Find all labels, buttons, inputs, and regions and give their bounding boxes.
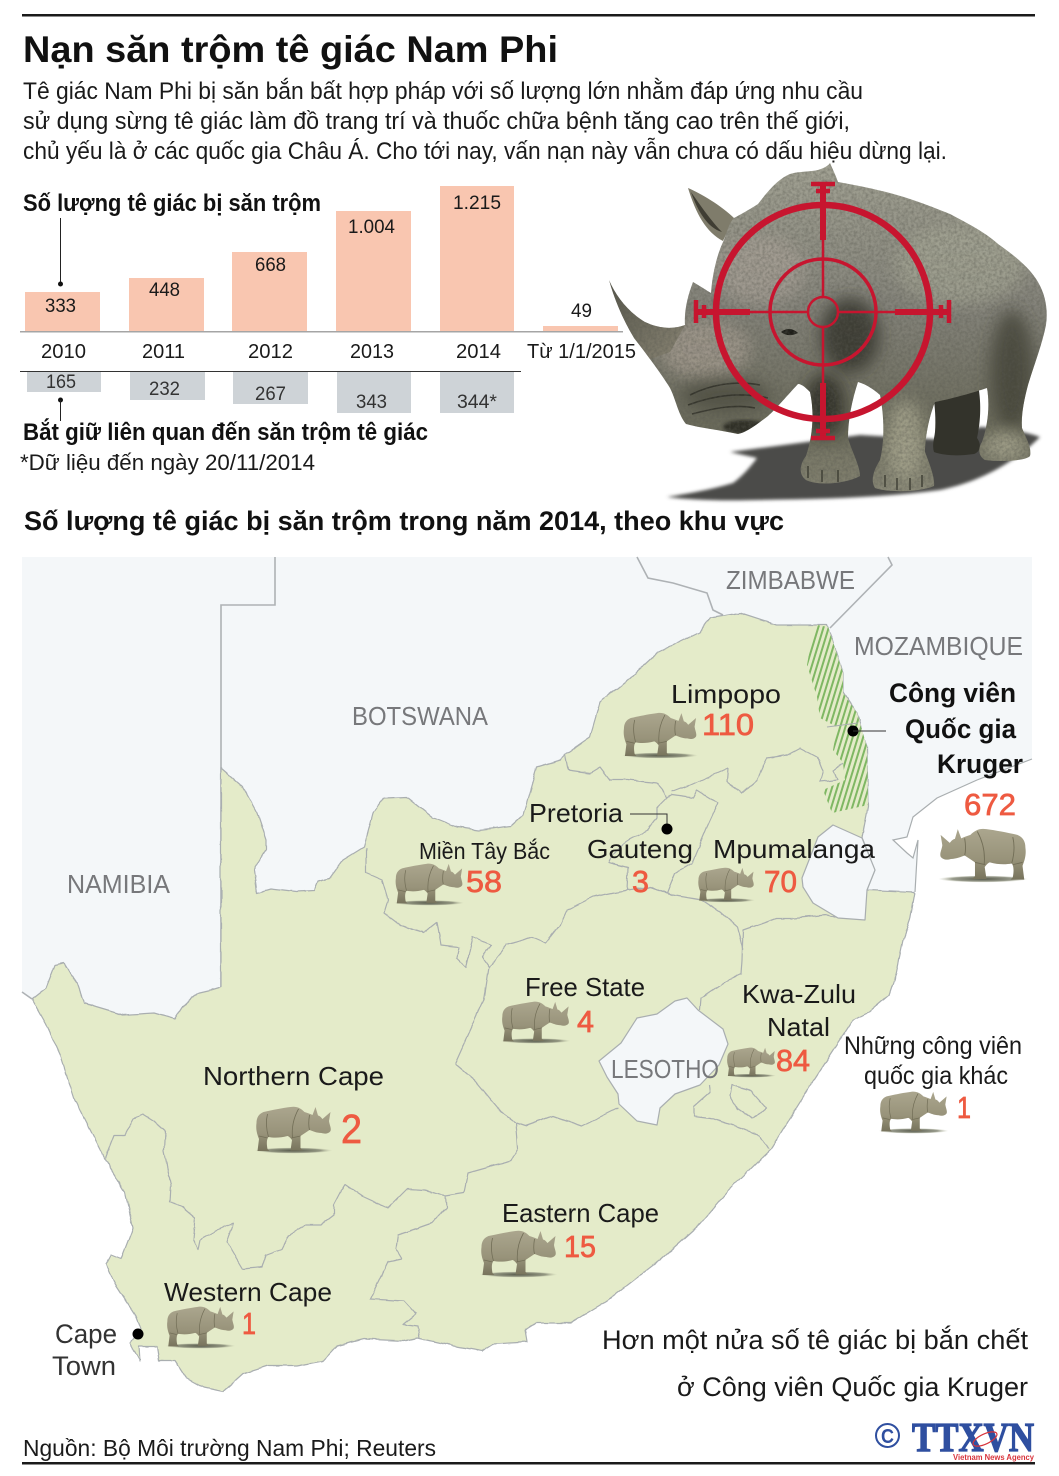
ground shadow [667,427,1040,500]
arrest axis [20,371,521,372]
country labels [67,565,1023,1084]
neighbouring countries [22,557,1032,1030]
year labels [41,341,636,363]
province borders [105,748,845,1338]
region: Mpumalanga: Mpumalanga [713,834,876,864]
region: Limpopo: 110 [702,707,754,742]
arrest values: 344* [457,392,498,413]
city: Pretoria: Pretoria [529,798,624,828]
region: Limpopo [622,679,781,758]
rhino body [609,163,1047,492]
region: Eastern Cape: 15 [564,1229,596,1264]
region: Eastern Cape: Eastern Cape [502,1198,659,1228]
region: Kwa-Zulu Natal: Natal [767,1012,830,1042]
left ear [688,188,734,241]
year labels: 2013 [350,341,394,363]
region: Mpumalanga [697,834,876,902]
region: other national parks: quốc gia khác [864,1062,1008,1090]
poached values: 448 [149,280,180,301]
region: Free State [501,972,645,1044]
region: Free State: 4 [577,1004,594,1039]
region: Gauteng: Gauteng [587,834,693,864]
country labels: BOTSWANA [352,701,489,731]
arrest values: 343 [356,392,387,413]
section heading: Số lượng tê giác bị săn trộm trong năm 2014, theo khu vực [24,506,784,536]
region: Kruger National Park: Quốc gia [905,714,1017,744]
region: Kwa-Zulu Natal: 84 [776,1043,810,1078]
chart heading: poached: Số lượng tê giác bị săn trộm [23,190,321,217]
arrest values [46,372,498,413]
poached values: 1.004 [348,217,395,238]
top rule [22,14,1035,16]
Kruger National Park hatching [807,625,868,813]
intro text: chủ yếu là ở các quốc gia Châu Á. Cho tới nay, vấn nạn này vẫn chưa có dấu hiệu dừng lại. [23,138,947,165]
region: Gauteng [587,834,693,899]
region: Northern Cape: Northern Cape [203,1061,384,1091]
bottom rule [22,1462,1035,1464]
year labels: Từ 1/1/2015 [527,341,636,363]
country labels: NAMIBIA [67,869,171,899]
city: Cape Town: Cape [55,1319,117,1349]
title: Nạn săn trộm tê giác Nam Phi [23,29,558,70]
region: Kruger National Park: 672 [964,787,1016,822]
chart heading: arrests: Bắt giữ liên quan đến săn trộm tê giác [23,418,428,446]
intro text: sử dụng sừng tê giác làm đồ trang trí và thuốc chữa bệnh tăng cao trên thế giới, [23,108,850,135]
logo: TTXVN [876,1414,1034,1462]
region: Kwa-Zulu Natal: Kwa-Zulu [742,979,856,1009]
region: other national parks: Những công viên [844,1032,1022,1060]
logo: TTXVN: TTXVN [912,1414,1034,1460]
source: Nguồn: Bộ Môi trường Nam Phi; Reuters [23,1435,436,1461]
intro text [23,78,947,165]
callout: Kruger share: ở Công viên Quốc gia Kruger [677,1372,1028,1402]
South Africa land [32,613,915,1392]
leader line: arrests [58,398,63,421]
footnote: *Dữ liệu đến ngày 20/11/2014 [20,450,315,475]
region: Kruger National Park [848,678,1028,882]
year labels: 2012 [248,341,293,363]
country labels: MOZAMBIQUE [854,631,1023,661]
crosshair [696,184,949,438]
Swaziland [802,825,875,920]
region: Kruger National Park: Công viên [889,678,1016,708]
intro text: Tê giác Nam Phi bị săn bắn bất hợp pháp với số lượng lớn nhằm đáp ứng nhu cầu [23,78,863,105]
leader line: poached [58,218,63,286]
year labels: 2010 [41,341,86,363]
arrest values: 267 [255,384,286,405]
region: Kwa-Zulu Natal [726,979,856,1078]
country labels: LESOTHO [611,1054,719,1084]
region: Northern Cape: 2 [341,1106,362,1152]
year labels: 2014 [456,341,501,363]
year labels: 2011 [142,341,185,363]
arrest bars [27,372,514,413]
big rhino with crosshair [600,150,1059,500]
poached values: 668 [255,255,286,276]
logo: TTXVN: Vietnam News Agency [953,1452,1034,1462]
country labels: ZIMBABWE [726,565,855,595]
region: North West: Miền Tây Bắc [419,838,550,864]
national borders [22,557,892,999]
Lesotho [599,998,728,1125]
region: Gauteng: 3 [632,864,649,899]
far hind leg [933,385,980,455]
poached values [45,193,592,322]
region: North West: 58 [466,864,502,899]
region: North West [394,838,550,906]
coast of Mozambique [893,759,1032,892]
city: Cape Town [52,1319,144,1381]
arrest values: 165 [46,372,76,393]
region: other national parks [844,1032,1022,1134]
baseline [20,331,623,332]
region: other national parks: 1 [957,1090,971,1125]
poached values: 333 [45,296,76,317]
poached bars [25,186,618,332]
region: Kruger National Park: Kruger [937,749,1023,779]
region: Western Cape: Western Cape [164,1277,332,1307]
region: Northern Cape [203,1061,384,1154]
city: Pretoria [529,798,672,834]
callout: Kruger share [602,1324,1028,1402]
arrest values: 232 [149,379,180,400]
region: Free State: Free State [525,972,645,1002]
region: Limpopo: Limpopo [671,679,781,709]
region: Western Cape [164,1277,332,1349]
map of South Africa [22,557,1032,1392]
region: Mpumalanga: 70 [764,864,797,899]
logo: TTXVN: C [881,1426,894,1448]
bar chart: poached rhinos and arrests [20,186,636,475]
callout: Kruger share: Hơn một nửa số tê giác bị bắn chết [602,1324,1028,1355]
region: Western Cape: 1 [242,1306,256,1341]
poached values: 49 [571,301,592,322]
region: Eastern Cape [480,1198,659,1278]
poached values: 1.215 [453,193,501,214]
city: Cape Town: Town [52,1351,116,1381]
